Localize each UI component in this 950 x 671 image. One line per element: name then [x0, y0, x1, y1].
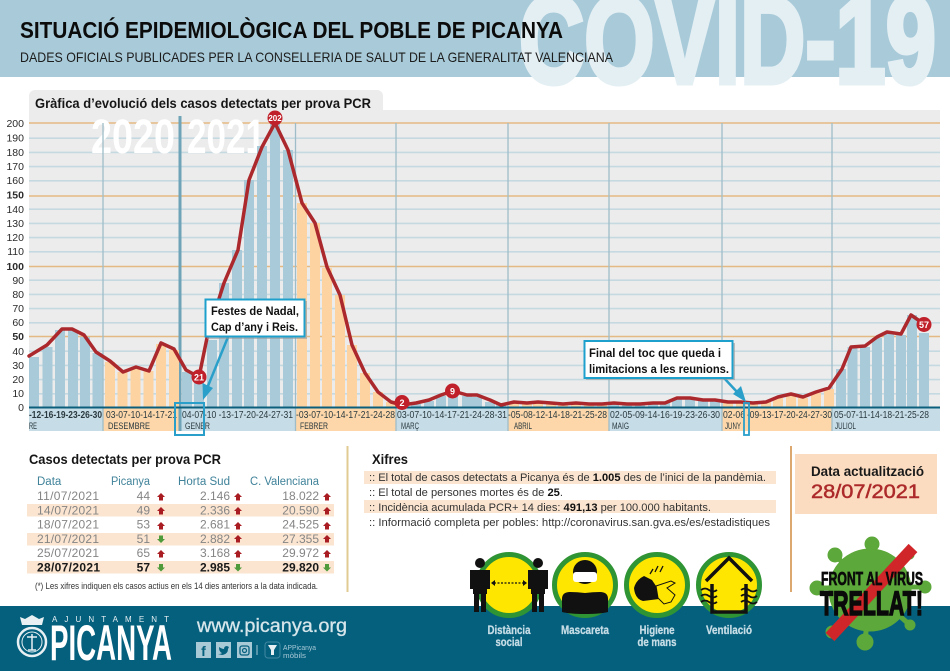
callout: festes de Nadal	[202, 300, 307, 400]
y axis labels: 10	[12, 388, 24, 400]
icon: twitter	[216, 642, 231, 658]
icon: mask	[554, 554, 616, 616]
panel: xifres	[364, 451, 776, 529]
y axis labels: 100	[6, 261, 24, 273]
y axis labels: 160	[6, 175, 24, 187]
x axis day labels: 05-07-11-14-18-21-25-28	[834, 410, 929, 421]
icon labels: social	[496, 635, 522, 649]
table rows: 2.985	[200, 560, 230, 574]
table rows: 57	[137, 560, 150, 574]
table footnote: (*) Les xifres indiquen els casos actius en els 14 dies anteriors a la data indicada.	[35, 581, 318, 591]
logo: Ajuntament de Picanya	[18, 615, 172, 671]
icon labels: Ventilació	[706, 623, 752, 637]
social icons: mòbils	[283, 651, 306, 660]
table rows: 14/07/2021	[37, 504, 99, 518]
xifres text lines: :: Informació completa per pobles: http://coronavirus.san.gva.es/es/estadistiques	[369, 517, 771, 529]
table rows: 49	[137, 504, 150, 518]
month labels: FEBRER	[300, 421, 328, 431]
panel: update date	[795, 454, 937, 514]
table rows: 44	[137, 489, 150, 503]
callout: festes de Nadal: Festes de Nadal,	[211, 304, 299, 318]
table heading: Casos detectats per prova PCR	[29, 451, 221, 467]
y axis labels: 0	[18, 402, 24, 414]
y axis labels: 50	[12, 331, 24, 343]
x axis day labels: -12-16-19-23-26-30	[29, 410, 102, 421]
table rows: 51	[137, 532, 150, 546]
bars: blue months	[29, 123, 929, 407]
x axis day labels	[29, 410, 929, 421]
y axis labels: 80	[12, 289, 24, 301]
value marker 202	[268, 110, 282, 126]
month labels: MAIG	[612, 421, 629, 431]
x axis day labels: 02-05-09-14-16-19-23-26-30	[610, 410, 720, 421]
callout: final del toc	[584, 341, 746, 402]
xifres text lines: :: El total de casos detectats a Picanya és de 1.005 des de l’inici de la pandèmia.	[369, 472, 766, 484]
main title: SITUACIÓ EPIDEMIOLÒGICA DEL POBLE DE PICANYA	[20, 16, 563, 43]
icon: ventilation	[698, 554, 760, 616]
y axis labels: 120	[6, 232, 24, 244]
icon: instagram	[237, 642, 252, 658]
y axis labels: 70	[12, 303, 24, 315]
y axis labels: 30	[12, 360, 24, 372]
table rows: 21/07/2021	[37, 532, 99, 546]
y axis labels: 200	[6, 118, 24, 130]
x axis day labels: 04-07-10 -13-17-20-24-27-31	[182, 410, 293, 421]
y axis labels	[6, 118, 24, 414]
icon labels	[488, 623, 752, 649]
table column headers: C. Valenciana	[250, 476, 320, 488]
y axis labels: 180	[6, 147, 24, 159]
icon labels: Mascareta	[561, 623, 609, 637]
arrow: to june	[724, 378, 738, 393]
callout: festes de Nadal: Cap d’any i Reis.	[211, 320, 298, 334]
icon labels: Distància	[488, 623, 531, 637]
table rows: 27.355	[282, 532, 319, 546]
value marker 9: 9	[450, 386, 455, 396]
month labels: DESEMBRE	[108, 421, 150, 431]
month labels: GENER	[185, 421, 210, 431]
table column headers: Horta Sud	[178, 476, 230, 488]
icon: facebook: f	[201, 643, 206, 659]
value marker 2	[394, 395, 410, 410]
x axis day labels: 03-07-10-14-17-21	[106, 410, 177, 421]
panel: update date: 28/07/2021	[811, 481, 920, 503]
x axis day labels: 03-07-10-14-17-21-24-28-31	[397, 410, 507, 421]
highlight: january	[175, 403, 204, 435]
year labels	[91, 111, 265, 164]
chart tab heading: Gràfica d’evolució dels casos detectats per prova PCR	[35, 95, 371, 111]
chart panel	[6, 90, 940, 435]
y axis labels: 60	[12, 317, 24, 329]
xifres text lines	[369, 472, 771, 529]
social icons	[196, 642, 317, 660]
month band	[29, 408, 940, 431]
table rows: 29.972	[282, 546, 319, 560]
table rows: 18/07/2021	[37, 518, 99, 532]
month labels: RE	[29, 421, 37, 431]
person right	[528, 558, 548, 612]
table rows: 29.820	[282, 560, 319, 574]
icon: town crest	[18, 615, 46, 656]
x axis day labels: -03-07-10-14-17-21-24-28	[296, 410, 395, 421]
x axis day labels: -09-13-17-20-24-27-30	[747, 410, 832, 421]
footer band	[0, 606, 950, 671]
table column headers: Data	[37, 476, 62, 488]
xifres text lines: :: Incidència acumulada PCR+ 14 dies: 491,13 per 100.000 habitants.	[369, 502, 711, 514]
y axis labels: 110	[7, 246, 24, 258]
icon: app	[265, 642, 280, 658]
table rows: 2.146	[200, 489, 230, 503]
table rows: 28/07/2021	[37, 560, 100, 574]
value marker 57	[916, 317, 932, 332]
xifres heading: Xifres	[372, 451, 408, 467]
header band	[0, 0, 950, 110]
value marker 57: 57	[919, 320, 929, 330]
table column headers	[37, 476, 320, 488]
y axis labels: 130	[6, 218, 24, 230]
website: www.picanya.org	[196, 616, 347, 637]
highlight: june	[744, 403, 749, 435]
y axis labels: 40	[12, 346, 24, 358]
x axis day labels: 02-06	[723, 410, 745, 421]
panel: update date: Data actualització	[811, 464, 924, 479]
logo: Ajuntament de Picanya: PICANYA	[50, 615, 172, 671]
month labels: JUNY	[725, 421, 741, 431]
icon labels: Higiene	[640, 623, 675, 637]
callout: final del toc: limitacions a les reunions.	[589, 362, 729, 376]
table rows: 65	[137, 546, 150, 560]
x axis day labels: -05-08-12-14-18-21-25-28	[508, 410, 607, 421]
icon: social distance	[470, 554, 548, 616]
value marker 21: 21	[194, 372, 204, 382]
social icons: APPicanya	[283, 643, 317, 652]
y axis labels: 170	[6, 161, 24, 173]
table rows	[37, 489, 319, 574]
bars: orange months	[105, 203, 834, 407]
table rows: 18.022	[282, 489, 319, 503]
slash	[830, 548, 913, 637]
logo: Ajuntament de Picanya: AJUNTAMENT	[52, 615, 169, 624]
value marker 2: 2	[399, 398, 405, 408]
year labels: 2020	[91, 111, 175, 164]
icon: hand hygiene	[626, 554, 688, 616]
y axis labels: 90	[12, 275, 24, 287]
table rows: 20.590	[282, 504, 319, 518]
month labels	[29, 421, 856, 431]
table rows: 2.681	[200, 518, 230, 532]
value marker 9	[445, 384, 460, 398]
person left	[470, 558, 490, 612]
y axis labels: 190	[6, 132, 24, 144]
icon: virus campaign	[810, 537, 931, 650]
value marker 202: 202	[268, 114, 282, 123]
table rows: 53	[137, 518, 150, 532]
table rows: 25/07/2021	[37, 546, 99, 560]
table rows: 2.882	[200, 532, 230, 546]
month labels: JULIOL	[835, 421, 856, 431]
y axis labels: 140	[6, 204, 24, 216]
table rows: 2.336	[200, 504, 230, 518]
trend arrows up	[157, 493, 331, 558]
month labels: ABRIL	[514, 421, 532, 431]
table rows: 11/07/2021	[37, 489, 99, 503]
line series	[29, 123, 924, 405]
year labels: 2021	[187, 111, 265, 164]
icon labels: de mans	[638, 635, 677, 649]
table rows: 3.168	[200, 546, 230, 560]
y axis labels: 20	[12, 374, 24, 386]
xifres text lines: :: El total de persones mortes és de 25.	[369, 487, 563, 499]
month labels: MARÇ	[401, 421, 419, 431]
value marker 21	[192, 370, 206, 384]
arrow: distance	[491, 580, 527, 586]
virus body	[810, 537, 931, 650]
arrow: to january	[208, 337, 228, 386]
table column headers: Picanya	[111, 476, 151, 488]
y axis labels: 150	[6, 190, 24, 202]
callout: final del toc: Final del toc que queda i	[589, 346, 721, 360]
subtitle: DADES OFICIALS PUBLICADES PER LA CONSELLERIA DE SALUT DE LA GENERALITAT VALENCIANA	[20, 49, 614, 65]
table: cases	[27, 451, 334, 591]
table rows: 24.525	[282, 518, 319, 532]
trend arrows down	[157, 536, 331, 572]
